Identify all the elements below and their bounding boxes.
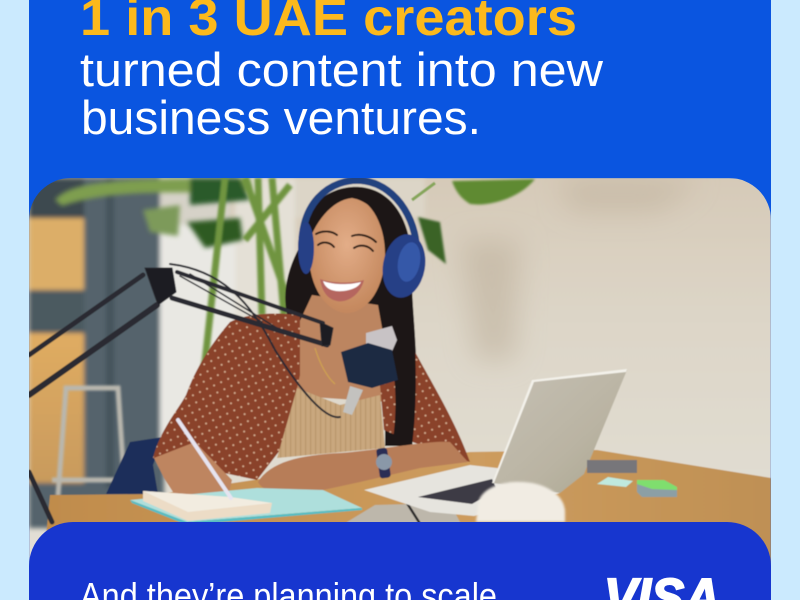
sticky note light [597, 477, 633, 487]
mic base [343, 386, 363, 415]
hair front [393, 350, 416, 444]
bracket [320, 322, 333, 346]
hair fringe [311, 194, 369, 233]
headline [80, 0, 604, 144]
eyes and brows [316, 231, 376, 251]
palm fronds [203, 178, 295, 380]
necklace [315, 348, 335, 384]
wall shadows [460, 180, 700, 360]
woman [153, 180, 470, 506]
lower arm [29, 305, 157, 395]
forward arm lower [172, 298, 327, 345]
lower stand [29, 472, 52, 522]
plant [55, 178, 535, 380]
arm braces [180, 274, 280, 330]
right ear cup [382, 234, 426, 298]
face [309, 195, 385, 313]
lid edge highlight [492, 369, 627, 483]
pen [178, 420, 231, 498]
keyboard [418, 479, 497, 504]
upper arm [29, 275, 143, 355]
forward arm upper [177, 272, 323, 323]
chair [106, 437, 163, 494]
stool [52, 388, 124, 496]
grille [366, 326, 397, 356]
laptop base [364, 465, 560, 516]
headline line two: turned content into new [80, 43, 604, 96]
shirt right side [380, 350, 470, 462]
sticky notes green [637, 480, 677, 497]
shock mount [341, 343, 398, 388]
panel background [29, 522, 771, 600]
neck and chest [296, 295, 386, 402]
hair back [285, 187, 416, 446]
ribbed top [277, 388, 385, 458]
left ear cup [298, 222, 314, 274]
shirt [153, 314, 300, 480]
coffee cup [476, 482, 565, 522]
headband [298, 178, 420, 242]
table [46, 450, 771, 565]
grey tablet and pen on desk [346, 504, 460, 522]
microphone [341, 326, 398, 415]
notebook [130, 488, 362, 525]
laptop [364, 369, 627, 516]
notepad [587, 460, 637, 473]
watch [376, 447, 392, 479]
headphones [298, 180, 430, 301]
cable [170, 264, 340, 417]
right leaves [452, 179, 535, 205]
bottom panel [29, 522, 771, 600]
leaves [55, 178, 252, 248]
laptop lid [493, 370, 627, 493]
left background room [29, 178, 425, 528]
cream pad [143, 491, 272, 521]
headline line three: business ventures. [81, 91, 481, 144]
wall [29, 178, 771, 600]
forearm and hand [258, 442, 468, 495]
writing hand [154, 443, 232, 494]
arm joint [145, 268, 176, 305]
photo: woman recording a podcast at a desk [29, 178, 771, 600]
teal folder [130, 488, 362, 522]
smile [320, 279, 364, 301]
microphone arm [29, 264, 340, 522]
